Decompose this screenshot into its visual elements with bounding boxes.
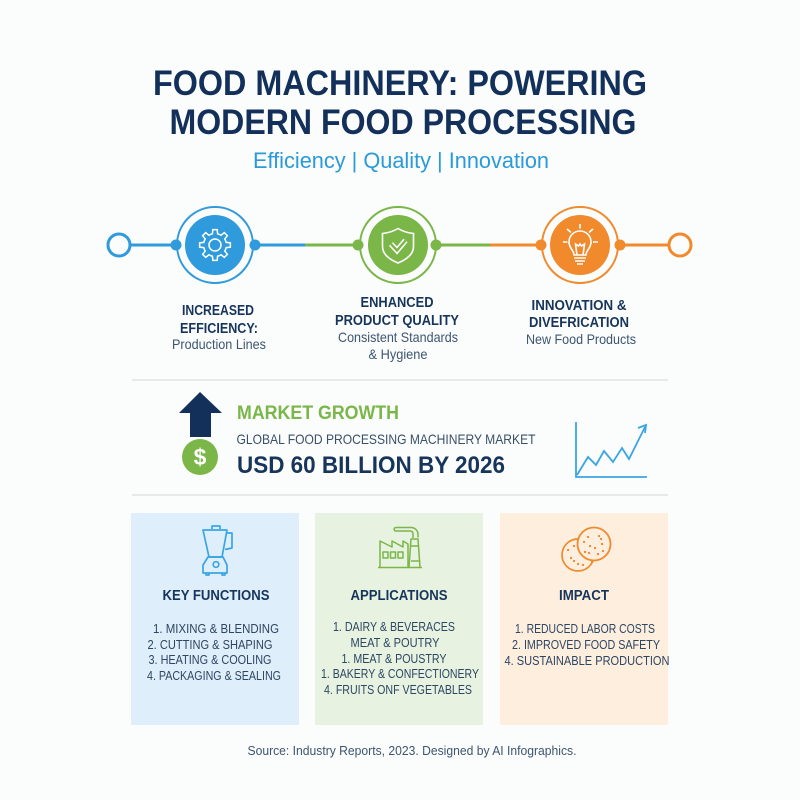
market growth text: USD 60 BILLION BY 2026 xyxy=(237,452,505,479)
market growth text: GLOBAL FOOD PROCESSING MACHINERY MARKET xyxy=(236,431,536,447)
applications list: 1. DAIRY & BEVERACES xyxy=(333,619,455,634)
timeline xyxy=(108,207,691,283)
icon: line chart xyxy=(576,422,647,477)
icon: light bulb in orange circle xyxy=(536,207,626,283)
icon: dollar coin: $ xyxy=(194,444,207,470)
impact list xyxy=(504,621,670,668)
icon: cookies xyxy=(562,528,610,571)
icon: gear in blue circle xyxy=(170,207,260,283)
key functions list: 2. CUTTING & SHAPING xyxy=(148,637,272,652)
applications list: 1. MEAT & POUSTRY xyxy=(342,651,447,666)
applications list: MEAT & POUTRY xyxy=(350,635,440,650)
panel: applications xyxy=(315,513,483,725)
panel: applications: APPLICATIONS xyxy=(350,588,448,604)
panel: key functions xyxy=(131,513,299,725)
column: innovation and diversification: New Food Products xyxy=(526,331,636,347)
column: enhanced product quality xyxy=(335,295,459,362)
icon: factory xyxy=(378,528,422,568)
column: enhanced product quality: Consistent Standards xyxy=(338,329,458,345)
applications list: 4. FRUITS ONF VEGETABLES xyxy=(324,682,472,697)
end ring xyxy=(669,234,691,256)
applications list: 1. BAKERY & CONFECTIONERY xyxy=(321,666,479,681)
key functions list: 1. MIXING & BLENDING xyxy=(153,621,279,636)
panel: impact xyxy=(500,513,670,725)
impact list: 2. IMPROVED FOOD SAFETY xyxy=(512,637,660,652)
column: increased efficiency xyxy=(172,303,266,352)
divider xyxy=(132,380,668,495)
title: MODERN FOOD PROCESSING xyxy=(170,103,636,142)
icon: dollar coin xyxy=(182,439,218,475)
column: increased efficiency: INCREASED xyxy=(182,303,254,319)
column: innovation and diversification: INNOVATION & xyxy=(532,298,627,314)
panel: key functions: KEY FUNCTIONS xyxy=(162,588,270,604)
source footer: Source: Industry Reports, 2023. Designed by AI Infographics. xyxy=(248,743,576,758)
panel: impact: IMPACT xyxy=(559,588,609,604)
column: enhanced product quality: ENHANCED xyxy=(360,295,434,311)
column: increased efficiency: EFFICIENCY: xyxy=(180,321,258,337)
column: enhanced product quality: PRODUCT QUALITY xyxy=(335,313,459,329)
start ring xyxy=(108,234,130,256)
market growth text: MARKET GROWTH xyxy=(237,403,399,424)
title: FOOD MACHINERY: POWERING xyxy=(153,64,647,103)
column: innovation and diversification: DIVEFRICATION xyxy=(529,315,629,331)
timeline connector xyxy=(130,244,669,246)
impact list: 1. REDUCED LABOR COSTS xyxy=(515,621,655,636)
key functions list: 4. PACKAGING & SEALING xyxy=(147,668,281,683)
key functions list: 3. HEATING & COOLING xyxy=(148,652,272,667)
column: innovation and diversification xyxy=(526,298,636,347)
column: increased efficiency: Production Lines xyxy=(172,336,266,352)
column: enhanced product quality: & Hygiene xyxy=(368,346,428,362)
market growth text xyxy=(236,403,536,479)
icon: shield in green circle xyxy=(352,207,442,283)
impact list: 4. SUSTAINABLE PRODUCTION xyxy=(504,653,670,668)
key functions list xyxy=(147,621,281,683)
subtitle: Efficiency | Quality | Innovation xyxy=(253,148,549,173)
applications list xyxy=(321,619,479,697)
icon: up arrow xyxy=(179,392,222,437)
icon: blender xyxy=(203,526,232,575)
title xyxy=(153,64,647,142)
